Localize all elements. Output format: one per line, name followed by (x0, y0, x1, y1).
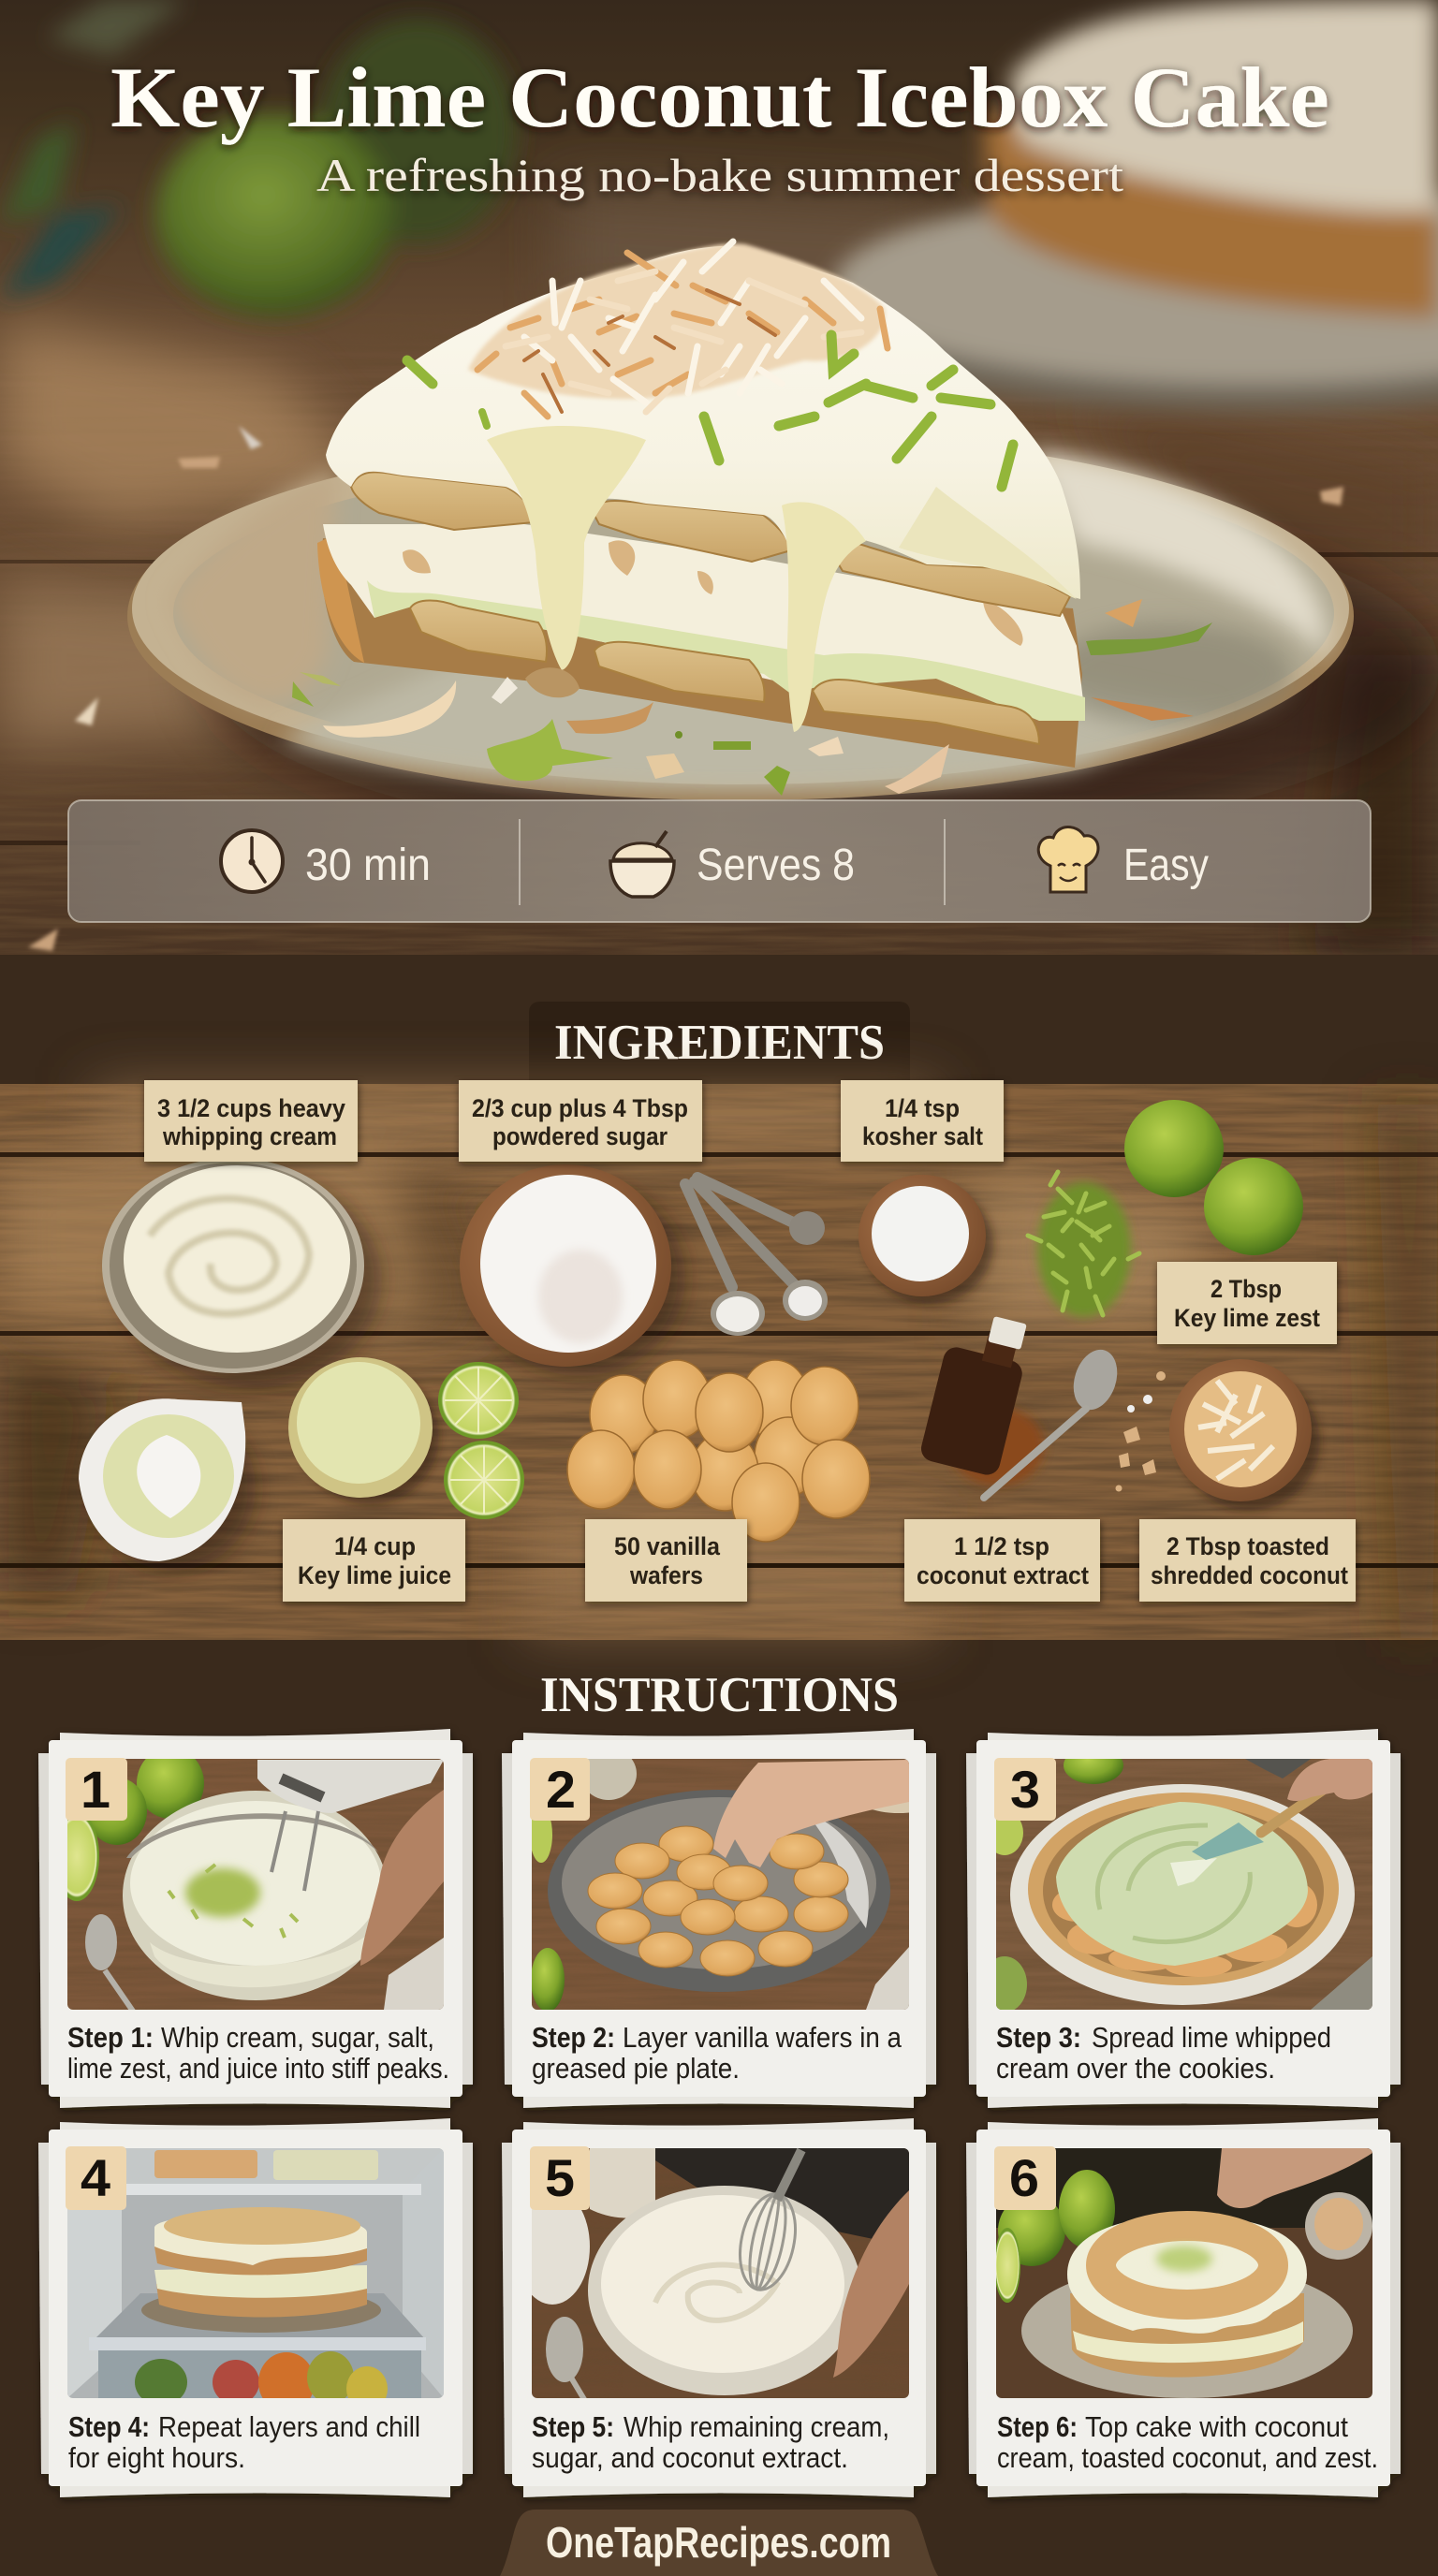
step 6 text: Top cake with coconut (1085, 2410, 1348, 2443)
step 3 text (996, 2021, 1331, 2085)
icon: bowl (610, 831, 674, 897)
layered cake (156, 2284, 367, 2318)
badge 5: 5 (545, 2148, 575, 2207)
step card 2 (502, 1729, 946, 2108)
stat: servings: Serves 8 (697, 841, 855, 890)
badge 1 (66, 1758, 127, 1821)
middle cream layer (323, 524, 1082, 696)
step 1 text: lime zest, and juice into stiff peaks. (67, 2052, 449, 2085)
icon: chef hat (1038, 827, 1098, 892)
coconut topping (468, 242, 888, 417)
lime cream band (367, 580, 1085, 721)
badge 6: 6 (1009, 2148, 1039, 2207)
label: coconut extract: coconut extract (917, 1561, 1089, 1589)
label: lime zest (1157, 1262, 1337, 1344)
step 1 photo (54, 1748, 444, 2012)
footer badge: OneTapRecipes.com (546, 2518, 891, 2567)
footer badge (500, 2510, 938, 2576)
ingredient labels (144, 1080, 1356, 1602)
badge 4 (66, 2146, 126, 2210)
icon: clock (221, 830, 283, 892)
stats bar (68, 800, 1371, 922)
lime zest (1028, 1172, 1139, 1317)
vanilla wafers (567, 1360, 870, 1542)
main plate (127, 436, 1438, 800)
wood table background (0, 106, 1438, 955)
label: lime juice: Key lime juice (298, 1561, 451, 1589)
badge 3: 3 (1010, 1760, 1040, 1819)
step 5 photo (515, 2148, 909, 2401)
label: vanilla wafers: wafers (629, 1561, 703, 1589)
salt bowl (858, 1175, 993, 1304)
step 3 text: cream over the cookies. (996, 2052, 1275, 2085)
step card 5 (502, 2118, 936, 2497)
step card 6 (966, 2118, 1401, 2497)
step 5 text: Step 5: (532, 2410, 614, 2443)
label: lime juice (283, 1519, 465, 1602)
label: coconut extract (904, 1519, 1100, 1602)
badge 6 (994, 2146, 1056, 2210)
instructions heading: INSTRUCTIONS (540, 1668, 899, 1722)
step 5 text (532, 2410, 889, 2474)
step 2 text (532, 2021, 902, 2085)
cut limes (438, 1362, 524, 1519)
spoon (984, 1344, 1124, 1498)
cake slice (317, 246, 1085, 768)
label: lime zest: Key lime zest (1174, 1304, 1320, 1332)
label: heavy cream: 3 1/2 cups heavy (157, 1094, 345, 1122)
label: lime zest: 2 Tbsp (1211, 1275, 1282, 1303)
badge 1: 1 (81, 1760, 110, 1819)
badge 5 (530, 2146, 590, 2210)
whole limes (1124, 1100, 1303, 1255)
panel: ingredients (0, 1002, 1438, 1640)
badge 2 (530, 1758, 590, 1821)
badge 4: 4 (81, 2148, 110, 2207)
step 2 text: Layer vanilla wafers in a (623, 2021, 902, 2054)
step 3 text: Spread lime whipped (1092, 2021, 1331, 2054)
step 6 text: cream, toasted coconut, and zest. (997, 2441, 1378, 2474)
step 2 text: greased pie plate. (532, 2052, 740, 2085)
top cream (326, 246, 1080, 599)
label: kosher salt (841, 1080, 1004, 1162)
ingredients heading: INGREDIENTS (554, 1016, 885, 1070)
juicer dish (79, 1398, 256, 1571)
label: shredded coconut: 2 Tbsp toasted (1167, 1532, 1329, 1560)
badge 2: 2 (546, 1760, 576, 1819)
wood board (0, 1084, 1438, 1640)
label: powdered sugar: powdered sugar (492, 1122, 668, 1150)
step 2 photo (530, 1748, 946, 2012)
cream bowl (102, 1158, 382, 1388)
step 4 text: Repeat layers and chill (158, 2410, 420, 2443)
label: shredded coconut (1139, 1519, 1356, 1602)
stat: time: 30 min (305, 841, 431, 890)
label: heavy cream: whipping cream (162, 1122, 337, 1150)
measuring spoons (685, 1178, 828, 1336)
label: heavy cream (144, 1080, 358, 1162)
badge 3 (994, 1758, 1056, 1821)
title: Key Lime Coconut Icebox Cake (110, 50, 1329, 145)
lime zest on slice (407, 335, 1013, 487)
step 4 text: for eight hours. (68, 2441, 245, 2474)
step 1 text: Step 1: (67, 2021, 154, 2054)
background limes and leaves (0, 0, 517, 316)
step 3 photo (982, 1747, 1372, 2012)
step 1 text (67, 2021, 449, 2085)
step 1 text: Whip cream, sugar, salt, (161, 2021, 434, 2054)
shredded coconut bowl (1169, 1359, 1320, 1511)
label: vanilla wafers: 50 vanilla (614, 1532, 721, 1560)
label: vanilla wafers (585, 1519, 747, 1602)
label: kosher salt: kosher salt (862, 1122, 983, 1150)
subtitle: A refreshing no-bake summer dessert (316, 149, 1123, 201)
background cake on plate (824, 0, 1438, 412)
step 4 text (68, 2410, 420, 2474)
lower wafers (410, 601, 547, 662)
upper wafers (351, 472, 534, 530)
step card 1 (38, 1729, 473, 2108)
panel: hero photo (0, 0, 1438, 955)
stat: difficulty: Easy (1123, 841, 1209, 890)
label: lime juice: 1/4 cup (334, 1532, 416, 1560)
step card 4 (38, 2118, 473, 2497)
step 4 text: Step 4: (68, 2410, 150, 2443)
step card 3 (966, 1729, 1401, 2108)
label: powdered sugar (459, 1080, 702, 1162)
label: kosher salt: 1/4 tsp (885, 1094, 960, 1122)
label: coconut extract: 1 1/2 tsp (954, 1532, 1049, 1560)
step 4 photo (67, 2148, 444, 2412)
cream drips (487, 426, 646, 670)
step 2 text: Step 2: (532, 2021, 615, 2054)
toasted coconut crumbs (1116, 1371, 1166, 1492)
step 3 text: Step 3: (996, 2021, 1081, 2054)
step 5 text: Whip remaining cream, (624, 2410, 889, 2443)
step 5 text: sugar, and coconut extract. (532, 2441, 848, 2474)
coconut extract bottle (918, 1316, 1044, 1486)
powdered sugar bowl (460, 1164, 685, 1376)
crumb base and orange side (321, 538, 1082, 768)
label: shredded coconut: shredded coconut (1151, 1561, 1348, 1589)
step 6 text: Step 6: (997, 2410, 1078, 2443)
step 6 text (997, 2410, 1378, 2474)
lime juice glass (288, 1357, 439, 1504)
step 6 photo (994, 2148, 1372, 2398)
label: powdered sugar: 2/3 cup plus 4 Tbsp (472, 1094, 688, 1122)
ingredients heading (529, 1002, 910, 1086)
plate crumbs (28, 426, 1343, 951)
